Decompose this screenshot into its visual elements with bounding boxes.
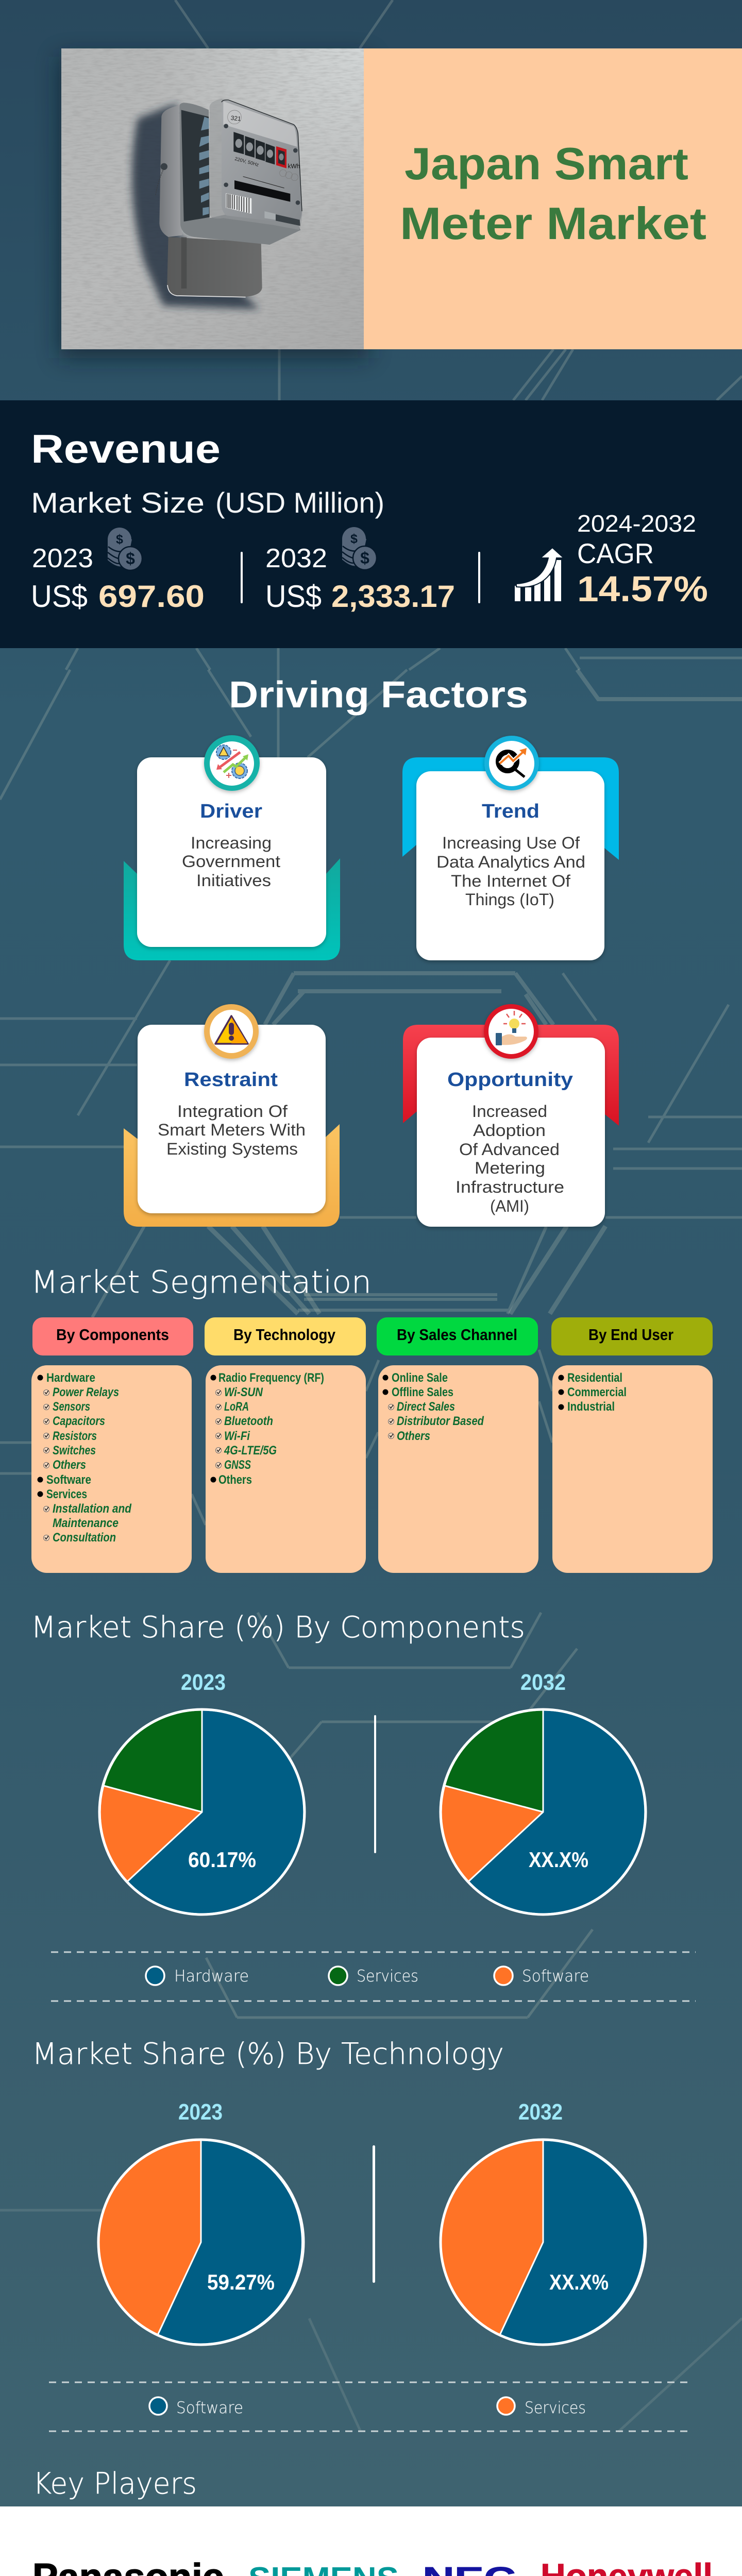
card text: restraint: Smart Meters With — [158, 1121, 306, 1139]
legend: technology — [149, 2397, 586, 2417]
card text: restraint — [158, 1102, 306, 1158]
card text: restraint: Existing Systems — [166, 1140, 298, 1158]
legend: components: Software — [522, 1967, 589, 1986]
segment column: by sales channel: By Sales Channel — [397, 1326, 517, 1344]
icon: coins 2032 — [342, 527, 377, 570]
hero photo: electricity meter on wall — [61, 48, 364, 349]
card title: opportunity: Opportunity — [447, 1069, 573, 1091]
segment column: by components: Hardware — [46, 1371, 95, 1385]
heading: key players: Key Players — [33, 2467, 197, 2501]
title — [400, 138, 706, 249]
segment column: by sales channel: Online Sale — [392, 1371, 448, 1385]
card text: driver: Initiatives — [196, 871, 271, 890]
value 2032: US$ — [265, 579, 322, 614]
icon: trend — [484, 736, 539, 790]
CAGR: CAGR — [577, 537, 654, 569]
card text: opportunity: Metering — [475, 1159, 545, 1177]
segment column: by components — [31, 1317, 193, 1573]
card text: trend: Things (IoT) — [465, 890, 554, 909]
segment column: by components: Resistors — [53, 1429, 97, 1443]
segment column: by components: Installation and — [53, 1502, 132, 1516]
chart: technology pie 2032 — [440, 2099, 646, 2345]
market size label: (USD Million) — [215, 486, 384, 519]
segment column: by components: Capacitors — [53, 1414, 105, 1428]
heading: revenue: Revenue — [31, 426, 221, 471]
segment column: by technology: By Technology — [233, 1326, 336, 1344]
segment column: by end user: Commercial — [567, 1385, 627, 1399]
segment column: by technology: LoRA — [224, 1400, 249, 1414]
segment column: by end user: By End User — [588, 1326, 673, 1344]
segment column: by end user: Industrial — [567, 1400, 615, 1414]
title: Japan Smart — [404, 138, 688, 189]
legend: technology: Services — [525, 2399, 586, 2417]
segment column: by sales channel: Others — [397, 1429, 430, 1443]
value 2032 — [265, 544, 455, 614]
legend: components — [146, 1967, 589, 1986]
hero photo: electricity meter on wall: 220V, 50Hz — [234, 156, 260, 167]
market size label: Market Size — [31, 486, 205, 519]
value 2023 — [31, 544, 205, 614]
hero photo: electricity meter on wall: 321 — [230, 114, 242, 123]
heading: driving factors: Driving Factors — [229, 674, 528, 716]
CAGR — [577, 510, 708, 609]
chart: technology pie 2023: 59.27% — [207, 2270, 275, 2294]
icon: driver — [204, 735, 260, 791]
CAGR: 14.57% — [577, 569, 708, 609]
chart: components pie 2023: 2023 — [181, 1670, 226, 1695]
card text: trend: Increasing Use Of — [442, 834, 580, 852]
card text: driver — [182, 834, 280, 890]
segment column: by end user — [551, 1317, 713, 1573]
card: opportunity — [403, 1004, 619, 1227]
icon: coins 2023 — [108, 528, 142, 570]
segment column: by components: Maintenance — [53, 1516, 119, 1530]
title: Meter Market — [400, 198, 706, 249]
card: driver — [124, 735, 340, 960]
card: restraint — [124, 1004, 340, 1227]
segment column: by components: Software — [46, 1473, 91, 1487]
segment column: by components: Sensors — [53, 1400, 90, 1414]
card text: driver: Government — [182, 852, 280, 871]
heading: market share by technology: Market Share (%) By Technology — [32, 2037, 504, 2071]
panel: key players logos — [0, 2506, 742, 2576]
segment column: by sales channel: Offline Sales — [392, 1385, 453, 1399]
segment column: by technology: Bluetooth — [224, 1414, 273, 1428]
chart: components pie 2023 — [99, 1670, 305, 1914]
chart: technology pie 2023 — [98, 2099, 303, 2345]
segment column: by components: Others — [53, 1458, 86, 1472]
card text: opportunity: Infrastructure — [456, 1178, 564, 1196]
segment column: by sales channel: Distributor Based — [397, 1414, 484, 1428]
segment column: by end user: Residential — [567, 1371, 622, 1385]
value 2023: 2023 — [32, 544, 93, 573]
card title: restraint: Restraint — [184, 1069, 278, 1091]
CAGR: 2024-2032 — [577, 510, 696, 537]
panel: revenue band — [0, 400, 742, 648]
segment column: by technology: Wi-Fi — [224, 1429, 250, 1443]
card: trend — [402, 736, 619, 960]
icon: growth arrow — [515, 548, 564, 601]
market size label — [31, 486, 384, 519]
segment column: by components: Switches — [53, 1444, 96, 1458]
icon: restraint — [204, 1004, 259, 1059]
chart: components pie 2023: 60.17% — [188, 1848, 256, 1872]
segment column: by sales channel: Direct Sales — [397, 1400, 455, 1414]
segment column: by components: Power Relays — [53, 1385, 119, 1399]
segment column: by components: By Components — [56, 1326, 169, 1344]
card text: opportunity: Adoption — [473, 1121, 546, 1140]
value 2032: 2032 — [265, 544, 327, 573]
segment column: by sales channel — [377, 1317, 538, 1573]
card text: trend — [436, 834, 585, 909]
segment column: by technology — [205, 1317, 366, 1573]
card title: driver: Driver — [200, 801, 262, 822]
legend: technology: Software — [176, 2399, 243, 2417]
card text: opportunity: (AMI) — [490, 1197, 529, 1215]
legend: components: Hardware — [174, 1967, 249, 1986]
card text: driver: Increasing — [191, 834, 272, 852]
segment column: by technology: GNSS — [224, 1458, 251, 1472]
chart: technology pie 2032: 2032 — [518, 2099, 563, 2125]
title panel — [364, 48, 742, 349]
card text: opportunity: Increased — [472, 1102, 547, 1121]
chart: components pie 2032 — [441, 1670, 646, 1914]
card text: restraint: Integration Of — [177, 1102, 288, 1121]
segment column: by technology: Radio Frequency (RF) — [218, 1371, 324, 1385]
card title: trend: Trend — [482, 801, 539, 822]
segment column: by components: Services — [46, 1487, 87, 1501]
panel: hero banner — [59, 48, 742, 358]
value 2032: 2,333.17 — [331, 579, 455, 614]
segment column: by technology: 4G-LTE/5G — [224, 1444, 277, 1458]
card text: trend: Data Analytics And — [436, 853, 585, 871]
segment column: by technology: Wi-SUN — [224, 1385, 263, 1399]
chart: technology pie 2023: 2023 — [178, 2099, 223, 2125]
heading: market segmentation: Market Segmentation — [31, 1264, 372, 1300]
card text: opportunity: Of Advanced — [459, 1140, 560, 1159]
segment column: by technology: Others — [218, 1473, 252, 1487]
legend: components: Services — [357, 1967, 418, 1986]
hero photo: electricity meter on wall: kWh — [288, 163, 300, 170]
chart: components pie 2032: XX.X% — [529, 1848, 588, 1872]
value 2023: 697.60 — [98, 579, 205, 614]
icon: opportunity — [484, 1004, 538, 1059]
card text: trend: The Internet Of — [451, 872, 570, 890]
chart: components pie 2032: 2032 — [520, 1670, 566, 1695]
chart: technology pie 2032: XX.X% — [549, 2270, 609, 2294]
segment column: by components: Consultation — [53, 1531, 116, 1545]
value 2023: US$ — [31, 579, 88, 614]
heading: market share by components: Market Share (%) By Components — [31, 1611, 525, 1645]
card text: opportunity — [456, 1102, 564, 1215]
